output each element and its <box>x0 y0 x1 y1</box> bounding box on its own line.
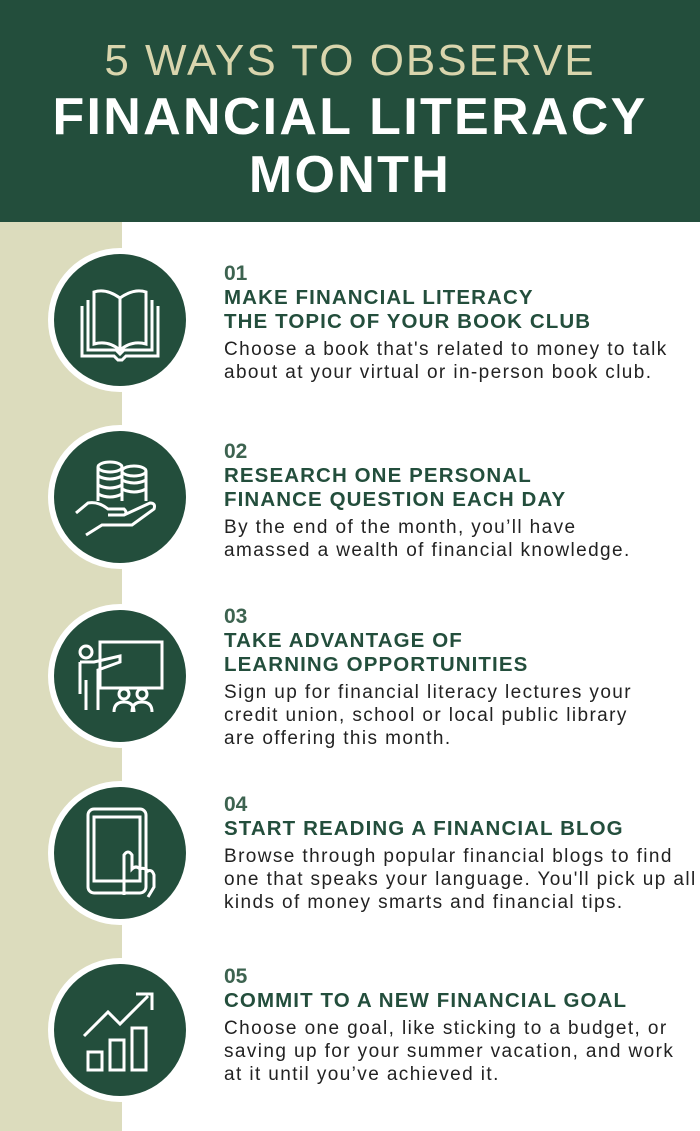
item 05: 05 <box>224 965 247 988</box>
item 03: credit union, school or local public library <box>224 705 628 726</box>
item 03: are offering this month. <box>224 728 452 749</box>
item 01 <box>224 262 668 383</box>
title main: FINANCIAL LITERACY <box>52 88 648 146</box>
item 03 <box>224 605 632 749</box>
item 04: 04 <box>224 793 247 816</box>
item 04: kinds of money smarts and financial tips. <box>224 892 624 913</box>
item 02: RESEARCH ONE PERSONAL <box>224 464 532 487</box>
item 05: Choose one goal, like sticking to a budget, or <box>224 1018 668 1039</box>
item 05: at it until you’ve achieved it. <box>224 1064 500 1085</box>
item 01: MAKE FINANCIAL LITERACY <box>224 286 534 309</box>
item 04 <box>224 793 697 913</box>
item 04: START READING A FINANCIAL BLOG <box>224 817 624 840</box>
icon: lecture <box>48 604 192 748</box>
item 02: amassed a wealth of financial knowledge. <box>224 540 631 561</box>
header <box>0 0 700 222</box>
item 01: about at your virtual or in-person book club. <box>224 362 652 383</box>
beige strip <box>0 222 122 1131</box>
item 01: THE TOPIC OF YOUR BOOK CLUB <box>224 310 591 333</box>
item 04: Browse through popular financial blogs to find <box>224 846 673 867</box>
item 01: 01 <box>224 262 247 285</box>
title main: MONTH <box>249 146 451 204</box>
item 02: FINANCE QUESTION EACH DAY <box>224 488 566 511</box>
item 02 <box>224 440 631 561</box>
icon: book <box>48 248 192 392</box>
item 02: By the end of the month, you’ll have <box>224 517 576 538</box>
item 03: LEARNING OPPORTUNITIES <box>224 653 528 676</box>
icon: tablet <box>48 781 192 925</box>
title line 1: 5 WAYS TO OBSERVE <box>104 36 596 85</box>
title main <box>52 88 648 204</box>
item 03: 03 <box>224 605 247 628</box>
item 05 <box>224 965 674 1085</box>
item 04: one that speaks your language. You'll pick up all <box>224 869 697 890</box>
icon: coins hand <box>48 425 192 569</box>
item 05: COMMIT TO A NEW FINANCIAL GOAL <box>224 989 627 1012</box>
icon: growth chart <box>48 958 192 1102</box>
item 05: saving up for your summer vacation, and work <box>224 1041 674 1062</box>
item 03: Sign up for financial literacy lectures your <box>224 682 632 703</box>
item 03: TAKE ADVANTAGE OF <box>224 629 463 652</box>
item 02: 02 <box>224 440 247 463</box>
item 01: Choose a book that's related to money to talk <box>224 339 668 360</box>
